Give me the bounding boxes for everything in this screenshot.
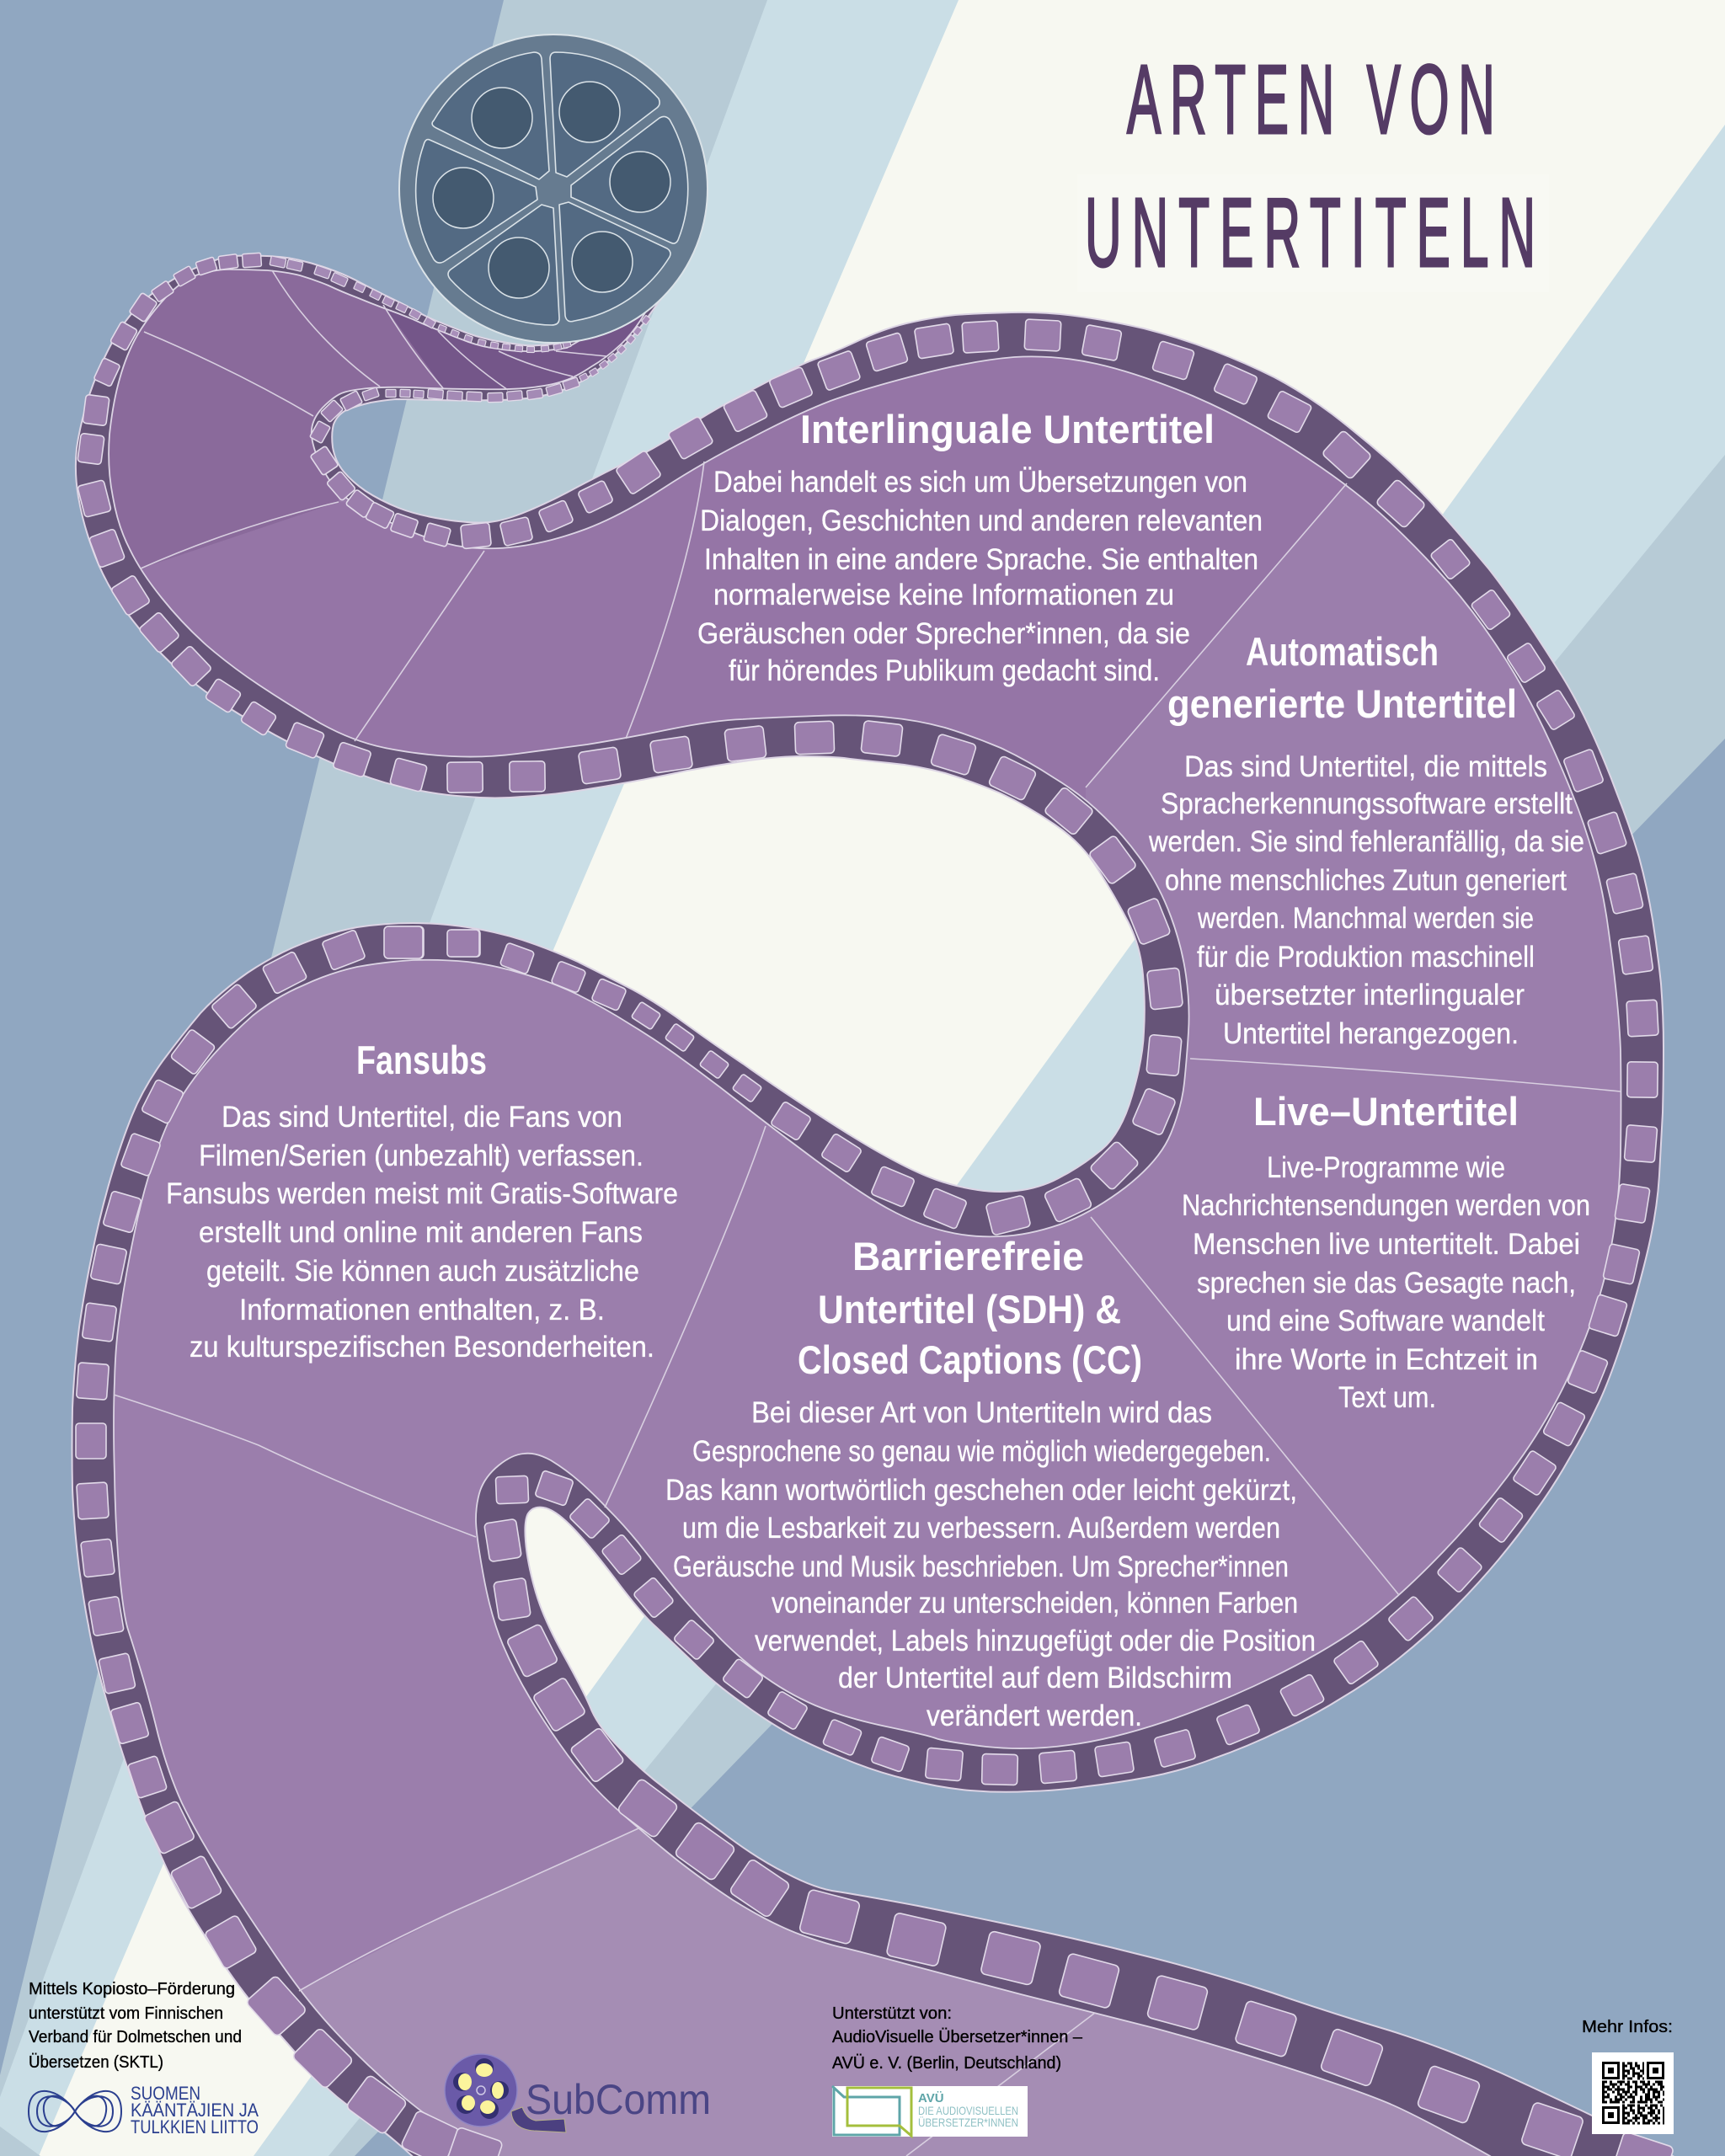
text block: Live-Untertitel: Text um. <box>1338 1381 1436 1414</box>
text block: Fansubs: Fansubs <box>356 1038 487 1082</box>
text block: Fansubs: Das sind Untertitel, die Fans von <box>222 1101 622 1134</box>
text block: Live-Untertitel: Live-Programme wie <box>1267 1151 1505 1184</box>
text block: Fansubs: Fansubs werden meist mit Gratis-Software <box>166 1177 678 1210</box>
text block: Live-Untertitel: sprechen sie das Gesagte nach, <box>1197 1267 1576 1299</box>
text block: Barrierefreie Untertitel: Gesprochene so genau wie möglich wiedergegeben. <box>692 1435 1271 1468</box>
text block: Automatisch generierte Untertitel: für die Produktion maschinell <box>1197 941 1535 974</box>
text block: Barrierefreie Untertitel: der Untertitel auf dem Bildschirm <box>838 1662 1232 1694</box>
text block: Live-Untertitel <box>1182 1089 1590 1414</box>
text block: Fansubs: zu kulturspezifischen Besonderheiten. <box>190 1331 654 1364</box>
footer text: AVÜ support: AudioVisuelle Übersetzer*innen – <box>832 2028 1083 2047</box>
text block: Automatisch generierte Untertitel: werden. Manchmal werden sie <box>1197 902 1534 935</box>
title: ARTEN VON <box>1127 45 1495 154</box>
text block: Automatisch generierte Untertitel: Spracherkennungssoftware erstellt <box>1161 787 1573 820</box>
footer text: AVÜ support: Unterstützt von: <box>832 2004 952 2023</box>
logo: SubComm: SubComm <box>526 2076 711 2123</box>
footer text: Kopiosto funding: Mittels Kopiosto–Förderung <box>29 1980 235 1999</box>
QR code <box>1592 2052 1674 2134</box>
film panels: coloured sections <box>109 270 1621 2156</box>
text block: Live-Untertitel: und eine Software wandelt <box>1226 1305 1545 1337</box>
text block: Automatisch generierte Untertitel: Das sind Untertitel, die mittels <box>1184 750 1547 783</box>
footer text: Kopiosto funding: Verband für Dolmetschen und <box>29 2028 242 2047</box>
logo: SKTL: SUOMEN <box>131 2083 200 2104</box>
text block: Fansubs: geteilt. Sie können auch zusätzliche <box>206 1255 639 1288</box>
text block: Interlinguale Untertitel: Dabei handelt es sich um Übersetzungen von <box>713 466 1247 499</box>
film frames <box>91 260 1642 2156</box>
text block: Barrierefreie Untertitel: um die Lesbarkeit zu verbessern. Außerdem werden <box>682 1512 1280 1545</box>
text block: Fansubs: erstellt und online mit anderen Fans <box>199 1216 643 1249</box>
text block: Barrierefreie Untertitel: Barrierefreie <box>852 1234 1084 1278</box>
logo: AVÜ: AVÜ <box>918 2091 944 2105</box>
text block: Automatisch generierte Untertitel: übersetzter interlingualer <box>1215 979 1525 1011</box>
text block: Automatisch generierte Untertitel: generierte Untertitel <box>1167 681 1517 726</box>
logo: AVÜ: ÜBERSETZER*INNEN <box>918 2115 1018 2129</box>
text block: Fansubs <box>166 1038 678 1364</box>
text block: Interlinguale Untertitel: Dialogen, Geschichten und anderen relevanten <box>700 504 1263 537</box>
text block: Automatisch generierte Untertitel: ohne menschliches Zutun generiert <box>1165 864 1567 897</box>
label: Mehr Infos: Mehr Infos: <box>1582 2018 1673 2036</box>
title <box>1077 45 1549 292</box>
footer text: AVÜ support: AVÜ e. V. (Berlin, Deutschland) <box>832 2054 1061 2073</box>
text block: Fansubs: Filmen/Serien (unbezahlt) verfassen. <box>199 1139 644 1172</box>
text block: Barrierefreie Untertitel: Closed Captions (CC) <box>798 1337 1142 1382</box>
text block: Automatisch generierte Untertitel: Untertitel herangezogen. <box>1223 1017 1519 1050</box>
text block: Interlinguale Untertitel: Interlinguale Untertitel <box>800 407 1215 451</box>
logo: AVÜ <box>832 2086 1028 2137</box>
text block: Barrierefreie Untertitel: voneinander zu unterscheiden, können Farben <box>772 1587 1298 1620</box>
text block: Barrierefreie Untertitel <box>665 1234 1316 1732</box>
text block: Interlinguale Untertitel <box>697 407 1263 687</box>
text block: Live-Untertitel: Nachrichtensendungen werden von <box>1182 1189 1590 1222</box>
text block: Barrierefreie Untertitel: verändert werden. <box>927 1700 1142 1732</box>
footer text: AVÜ support <box>832 2004 1083 2073</box>
logo: SKTL: TULKKIEN LIITTO <box>131 2116 259 2137</box>
text block: Live-Untertitel: Menschen live untertitelt. Dabei <box>1193 1228 1580 1261</box>
footer text: Kopiosto funding: Übersetzen (SKTL) <box>29 2053 163 2072</box>
text block: Interlinguale Untertitel: Geräuschen oder Sprecher*innen, da sie <box>697 617 1190 650</box>
logo: SKTL <box>29 2083 259 2137</box>
logo: AVÜ: DIE AUDIOVISUELLEN <box>918 2104 1018 2117</box>
icon: film reel <box>399 35 708 343</box>
panel dividers <box>114 270 1621 2156</box>
title: UNTERTITELN <box>1085 178 1535 287</box>
text block: Automatisch generierte Untertitel <box>1148 629 1584 1050</box>
text block: Interlinguale Untertitel: für hörendes Publikum gedacht sind. <box>729 654 1160 687</box>
footer text: Kopiosto funding: unterstützt vom Finnischen <box>29 2004 223 2023</box>
text block: Live-Untertitel: Live–Untertitel <box>1253 1089 1519 1134</box>
text block: Interlinguale Untertitel: Inhalten in eine andere Sprache. Sie enthalten <box>704 543 1258 576</box>
footer text: Kopiosto funding <box>29 1980 242 2072</box>
text block: Automatisch generierte Untertitel: werden. Sie sind fehleranfällig, da sie <box>1148 825 1584 858</box>
text block: Barrierefreie Untertitel: Bei dieser Art von Untertiteln wird das <box>751 1396 1212 1429</box>
text block: Fansubs: Informationen enthalten, z. B. <box>239 1294 605 1326</box>
text block: Live-Untertitel: ihre Worte in Echtzeit in <box>1235 1343 1538 1376</box>
text block: Interlinguale Untertitel: normalerweise keine Informationen zu <box>713 579 1174 611</box>
logo: SKTL: KÄÄNTÄJIEN JA <box>131 2100 259 2121</box>
logo: SubComm <box>445 2054 711 2132</box>
text block: Barrierefreie Untertitel: Geräusche und Musik beschrieben. Um Sprecher*innen <box>673 1550 1289 1583</box>
text block: Automatisch generierte Untertitel: Automatisch <box>1246 629 1439 674</box>
text block: Barrierefreie Untertitel: verwendet, Labels hinzugefügt oder die Position <box>755 1625 1316 1657</box>
text block: Barrierefreie Untertitel: Das kann wortwörtlich geschehen oder leicht gekürzt, <box>665 1474 1297 1507</box>
text block: Barrierefreie Untertitel: Untertitel (SDH) & <box>818 1287 1121 1331</box>
